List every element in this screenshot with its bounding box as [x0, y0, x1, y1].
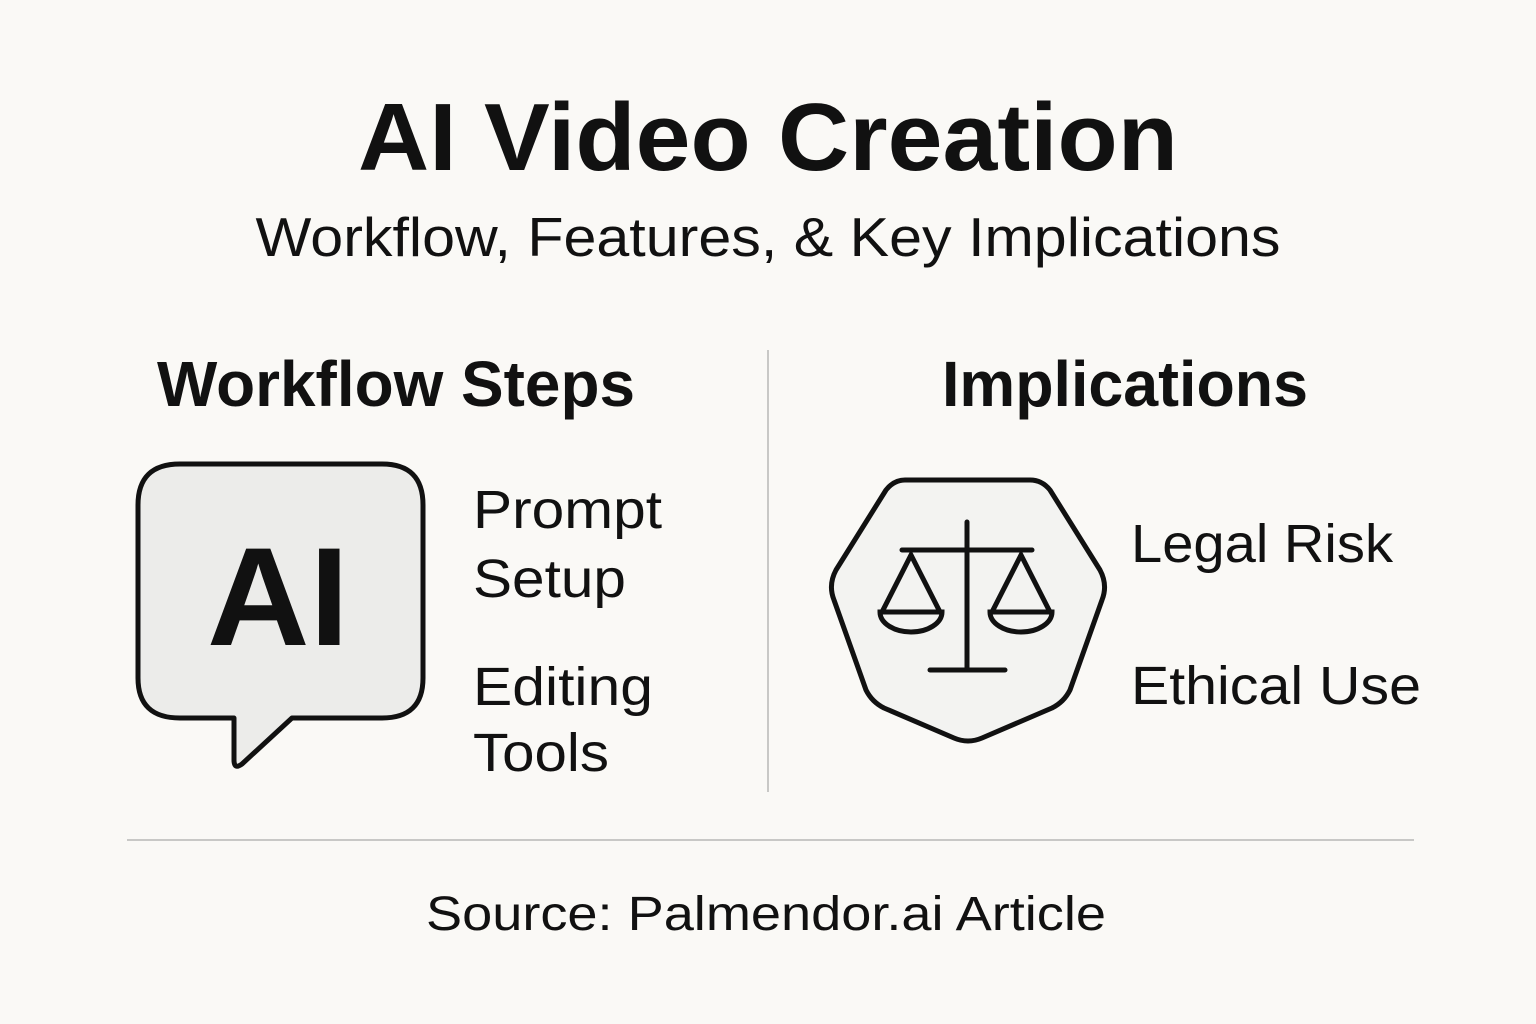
text: editing tools: Tools — [473, 723, 609, 783]
text: ethical use: Ethical Use — [1131, 656, 1421, 716]
source: Source: Palmendor.ai Article — [426, 888, 1106, 941]
text: prompt setup: Setup — [473, 549, 626, 609]
text: editing tools: Editing — [473, 657, 653, 717]
text: legal risk: Legal Risk — [1131, 514, 1394, 574]
heading: workflow steps: Workflow Steps — [157, 348, 635, 420]
subtitle: Workflow, Features, & Key Implications — [256, 206, 1280, 268]
title: AI Video Creation — [358, 84, 1178, 191]
icon: AI speech bubble — [138, 464, 423, 766]
icon: scales in heptagon — [831, 480, 1105, 741]
text: editing tools — [473, 657, 653, 783]
heading: implications: Implications — [942, 348, 1308, 420]
text: prompt setup: Prompt — [473, 480, 662, 540]
text: prompt setup — [473, 480, 662, 609]
icon: AI speech bubble: AI — [207, 518, 349, 675]
